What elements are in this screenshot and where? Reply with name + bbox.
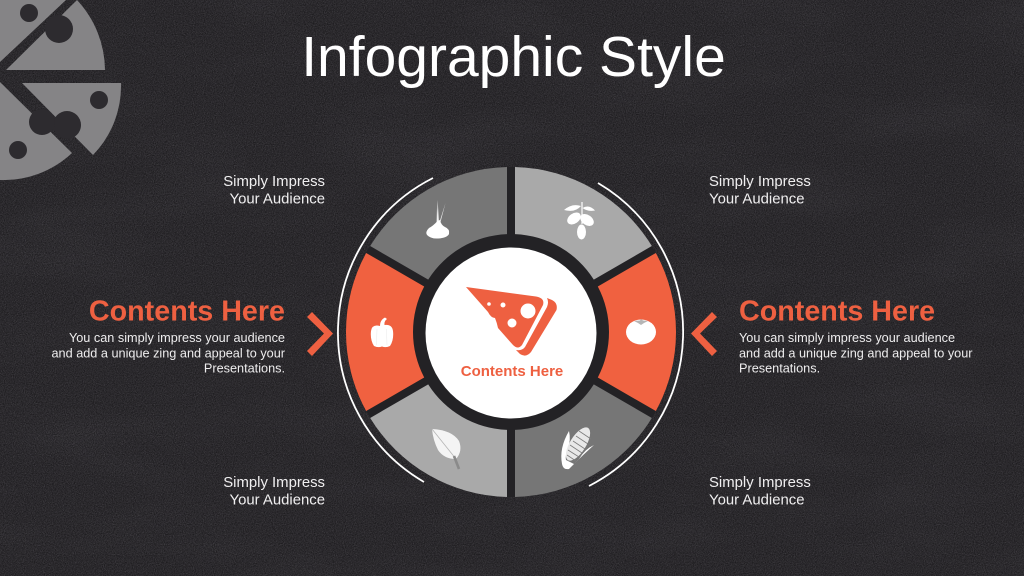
text block: right bbox=[739, 296, 973, 376]
right outer arc bbox=[589, 183, 683, 486]
text block: left: and add a unique zing and appeal to your bbox=[52, 346, 286, 360]
text block: right: and add a unique zing and appeal to your bbox=[739, 346, 973, 360]
text block: right: Contents Here bbox=[739, 296, 935, 328]
center label: Contents Here bbox=[461, 363, 563, 380]
text block: left bbox=[52, 296, 286, 376]
segment: bottom-right bbox=[515, 384, 652, 497]
decorative pizza slices top-left bbox=[0, 0, 121, 180]
label: top-left bbox=[223, 174, 325, 208]
label: bottom-right bbox=[709, 475, 811, 508]
segment: top-right bbox=[515, 167, 652, 280]
text block: left: Contents Here bbox=[89, 296, 285, 328]
label: top-left: Your Audience bbox=[230, 192, 325, 208]
segment: right (orange) bbox=[598, 253, 676, 411]
text block: right: Presentations. bbox=[739, 362, 820, 376]
dark disc behind wheel bbox=[346, 167, 676, 497]
left outer arc bbox=[338, 178, 433, 482]
icon: leaf bbox=[432, 429, 460, 469]
chevron: right bbox=[691, 312, 717, 356]
label: bottom-right: Your Audience bbox=[709, 492, 804, 508]
icon: onion bbox=[426, 200, 449, 239]
title: Infographic Style bbox=[301, 25, 726, 89]
text block: left: Presentations. bbox=[204, 362, 285, 376]
text block: left: You can simply impress your audience bbox=[69, 331, 285, 345]
label: bottom-right: Simply Impress bbox=[709, 475, 811, 491]
center pizza logo bbox=[466, 287, 557, 356]
segment: top-left bbox=[370, 167, 507, 280]
icon: olive branch bbox=[564, 202, 596, 240]
icon: bell pepper bbox=[371, 318, 393, 347]
center white circle bbox=[426, 248, 596, 418]
icon: tomato bbox=[626, 319, 656, 344]
label: top-right bbox=[709, 174, 811, 208]
label: bottom-left: Your Audience bbox=[230, 492, 325, 508]
label: top-right: Simply Impress bbox=[709, 174, 811, 190]
label: bottom-left: Simply Impress bbox=[223, 475, 325, 491]
label: bottom-left bbox=[223, 475, 325, 508]
label: top-left: Simply Impress bbox=[223, 174, 325, 190]
label: top-right: Your Audience bbox=[709, 192, 804, 208]
segment: left (orange) bbox=[346, 253, 424, 411]
segment: bottom-left bbox=[370, 384, 507, 497]
chevron: left bbox=[307, 312, 333, 356]
text block: right: You can simply impress your audience bbox=[739, 331, 955, 345]
icon: corn bbox=[561, 424, 595, 469]
